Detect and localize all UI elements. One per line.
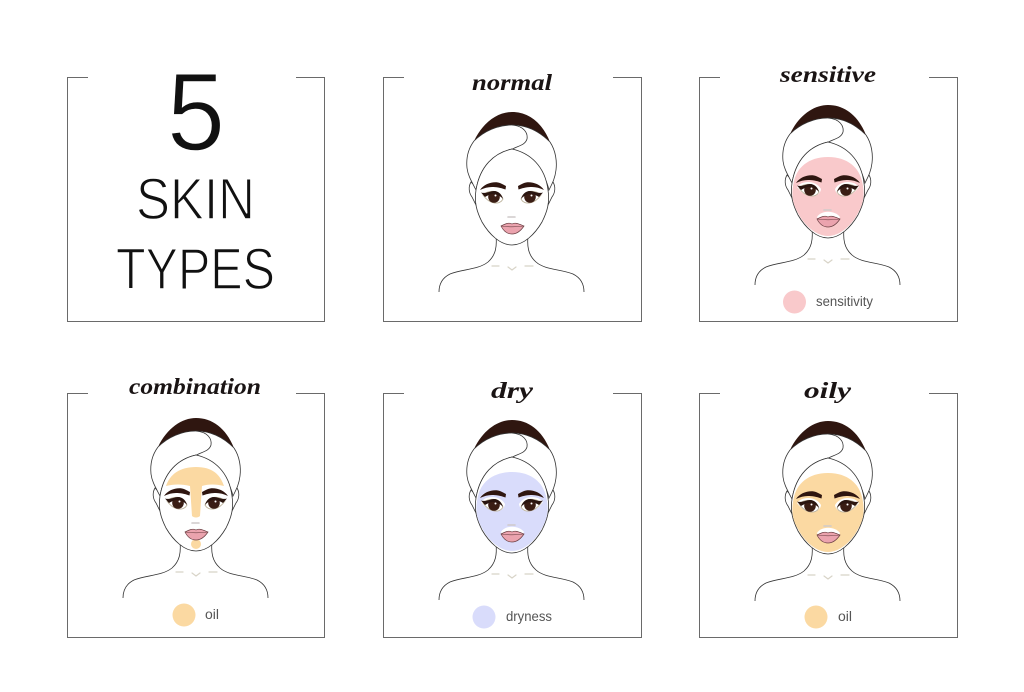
legend label: oil: oil bbox=[838, 609, 852, 624]
oil zone: T-zone bbox=[166, 467, 224, 518]
title word TYPES: TYPES bbox=[116, 237, 275, 302]
panel: combination bbox=[68, 374, 324, 638]
title word SKIN: SKIN bbox=[136, 167, 255, 232]
heading: combination: combination bbox=[129, 374, 261, 399]
panel: dry bbox=[384, 378, 642, 638]
panel: normal bbox=[384, 70, 642, 322]
panel: title bbox=[68, 51, 324, 322]
face illustration: normal bbox=[439, 112, 584, 292]
face illustration: oily bbox=[755, 421, 900, 601]
oil zone: chin bbox=[191, 539, 201, 549]
heading: normal: normal bbox=[472, 70, 553, 95]
legend swatch: sensitivity bbox=[783, 290, 806, 314]
face illustration: sensitive bbox=[755, 105, 900, 285]
face illustration: combination bbox=[123, 418, 268, 598]
legend label: oil: oil bbox=[205, 607, 219, 622]
heading: oily: oily bbox=[804, 378, 852, 403]
panel: sensitive bbox=[700, 62, 958, 322]
legend swatch: oil bbox=[804, 606, 828, 628]
face illustration: dry bbox=[439, 420, 584, 600]
legend label: sensitivity: sensitivity bbox=[816, 294, 873, 309]
heading: dry: dry bbox=[491, 378, 534, 403]
heading: sensitive: sensitive bbox=[779, 62, 876, 87]
legend swatch: dryness bbox=[472, 606, 496, 628]
panel: oily bbox=[700, 378, 958, 638]
title number 5: 5 bbox=[167, 51, 225, 174]
legend swatch: oil bbox=[172, 604, 196, 626]
legend label: dryness: dryness bbox=[506, 609, 552, 624]
